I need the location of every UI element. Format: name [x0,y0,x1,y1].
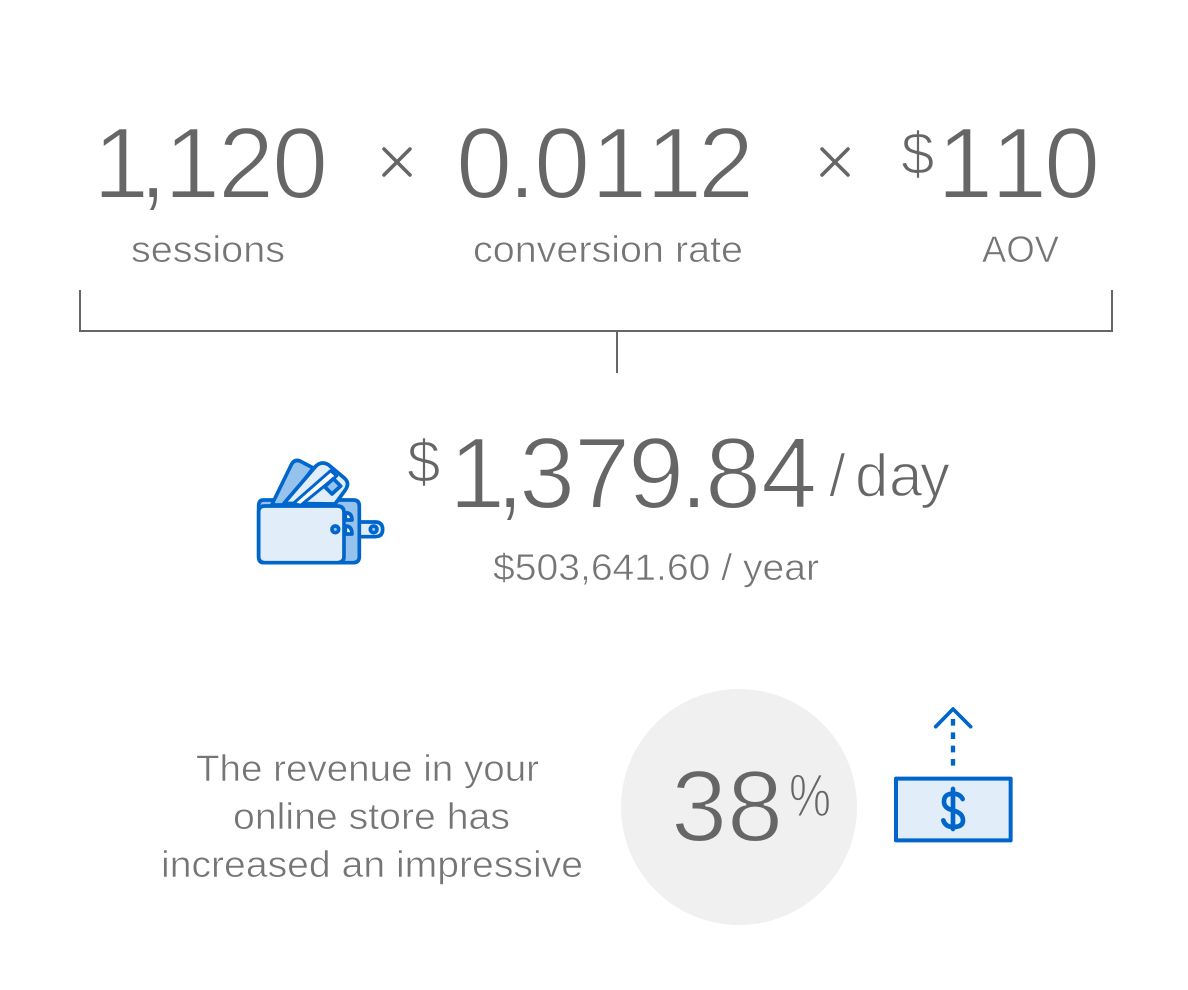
strap [353,522,383,537]
daily revenue value: 1,379.84 [449,418,817,530]
wallet front [259,506,344,563]
formula: conversion rate value: 0.0112 [456,108,754,220]
conversion rate label: conversion rate [473,229,743,270]
multiply sign 1 [384,149,410,175]
bill dollar symbol [943,789,963,829]
sessions label: sessions [131,229,285,270]
formula: sessions value: 1,120 [93,108,328,220]
per day unit: /day [829,442,950,509]
revenue statement: online store has [233,796,510,837]
dollar sign for AOV: $ [901,120,934,187]
back of wallet [259,500,359,563]
bracket connector [80,290,1112,373]
back card [272,460,313,505]
front card [284,463,348,504]
revenue statement: increased an impressive [161,844,583,885]
dashed shaft [946,719,959,766]
percentage circle [621,689,857,925]
revenue statement [161,748,583,885]
slots [345,513,352,534]
bill [896,779,1011,840]
percent sign: % [789,762,831,829]
revenue statement: The revenue in your [196,748,539,789]
multiply sign 2 [822,149,848,175]
yearly revenue: $503,641.60 / year [493,547,819,588]
percentage value: 38 [671,751,783,863]
icon: dollar bill with up arrow [896,709,1011,840]
formula: AOV value: 110 [937,108,1100,220]
AOV label: AOV [982,229,1059,270]
icon: wallet with cards [259,460,383,563]
daily dollar sign: $ [407,428,440,495]
arrow head [936,709,971,727]
